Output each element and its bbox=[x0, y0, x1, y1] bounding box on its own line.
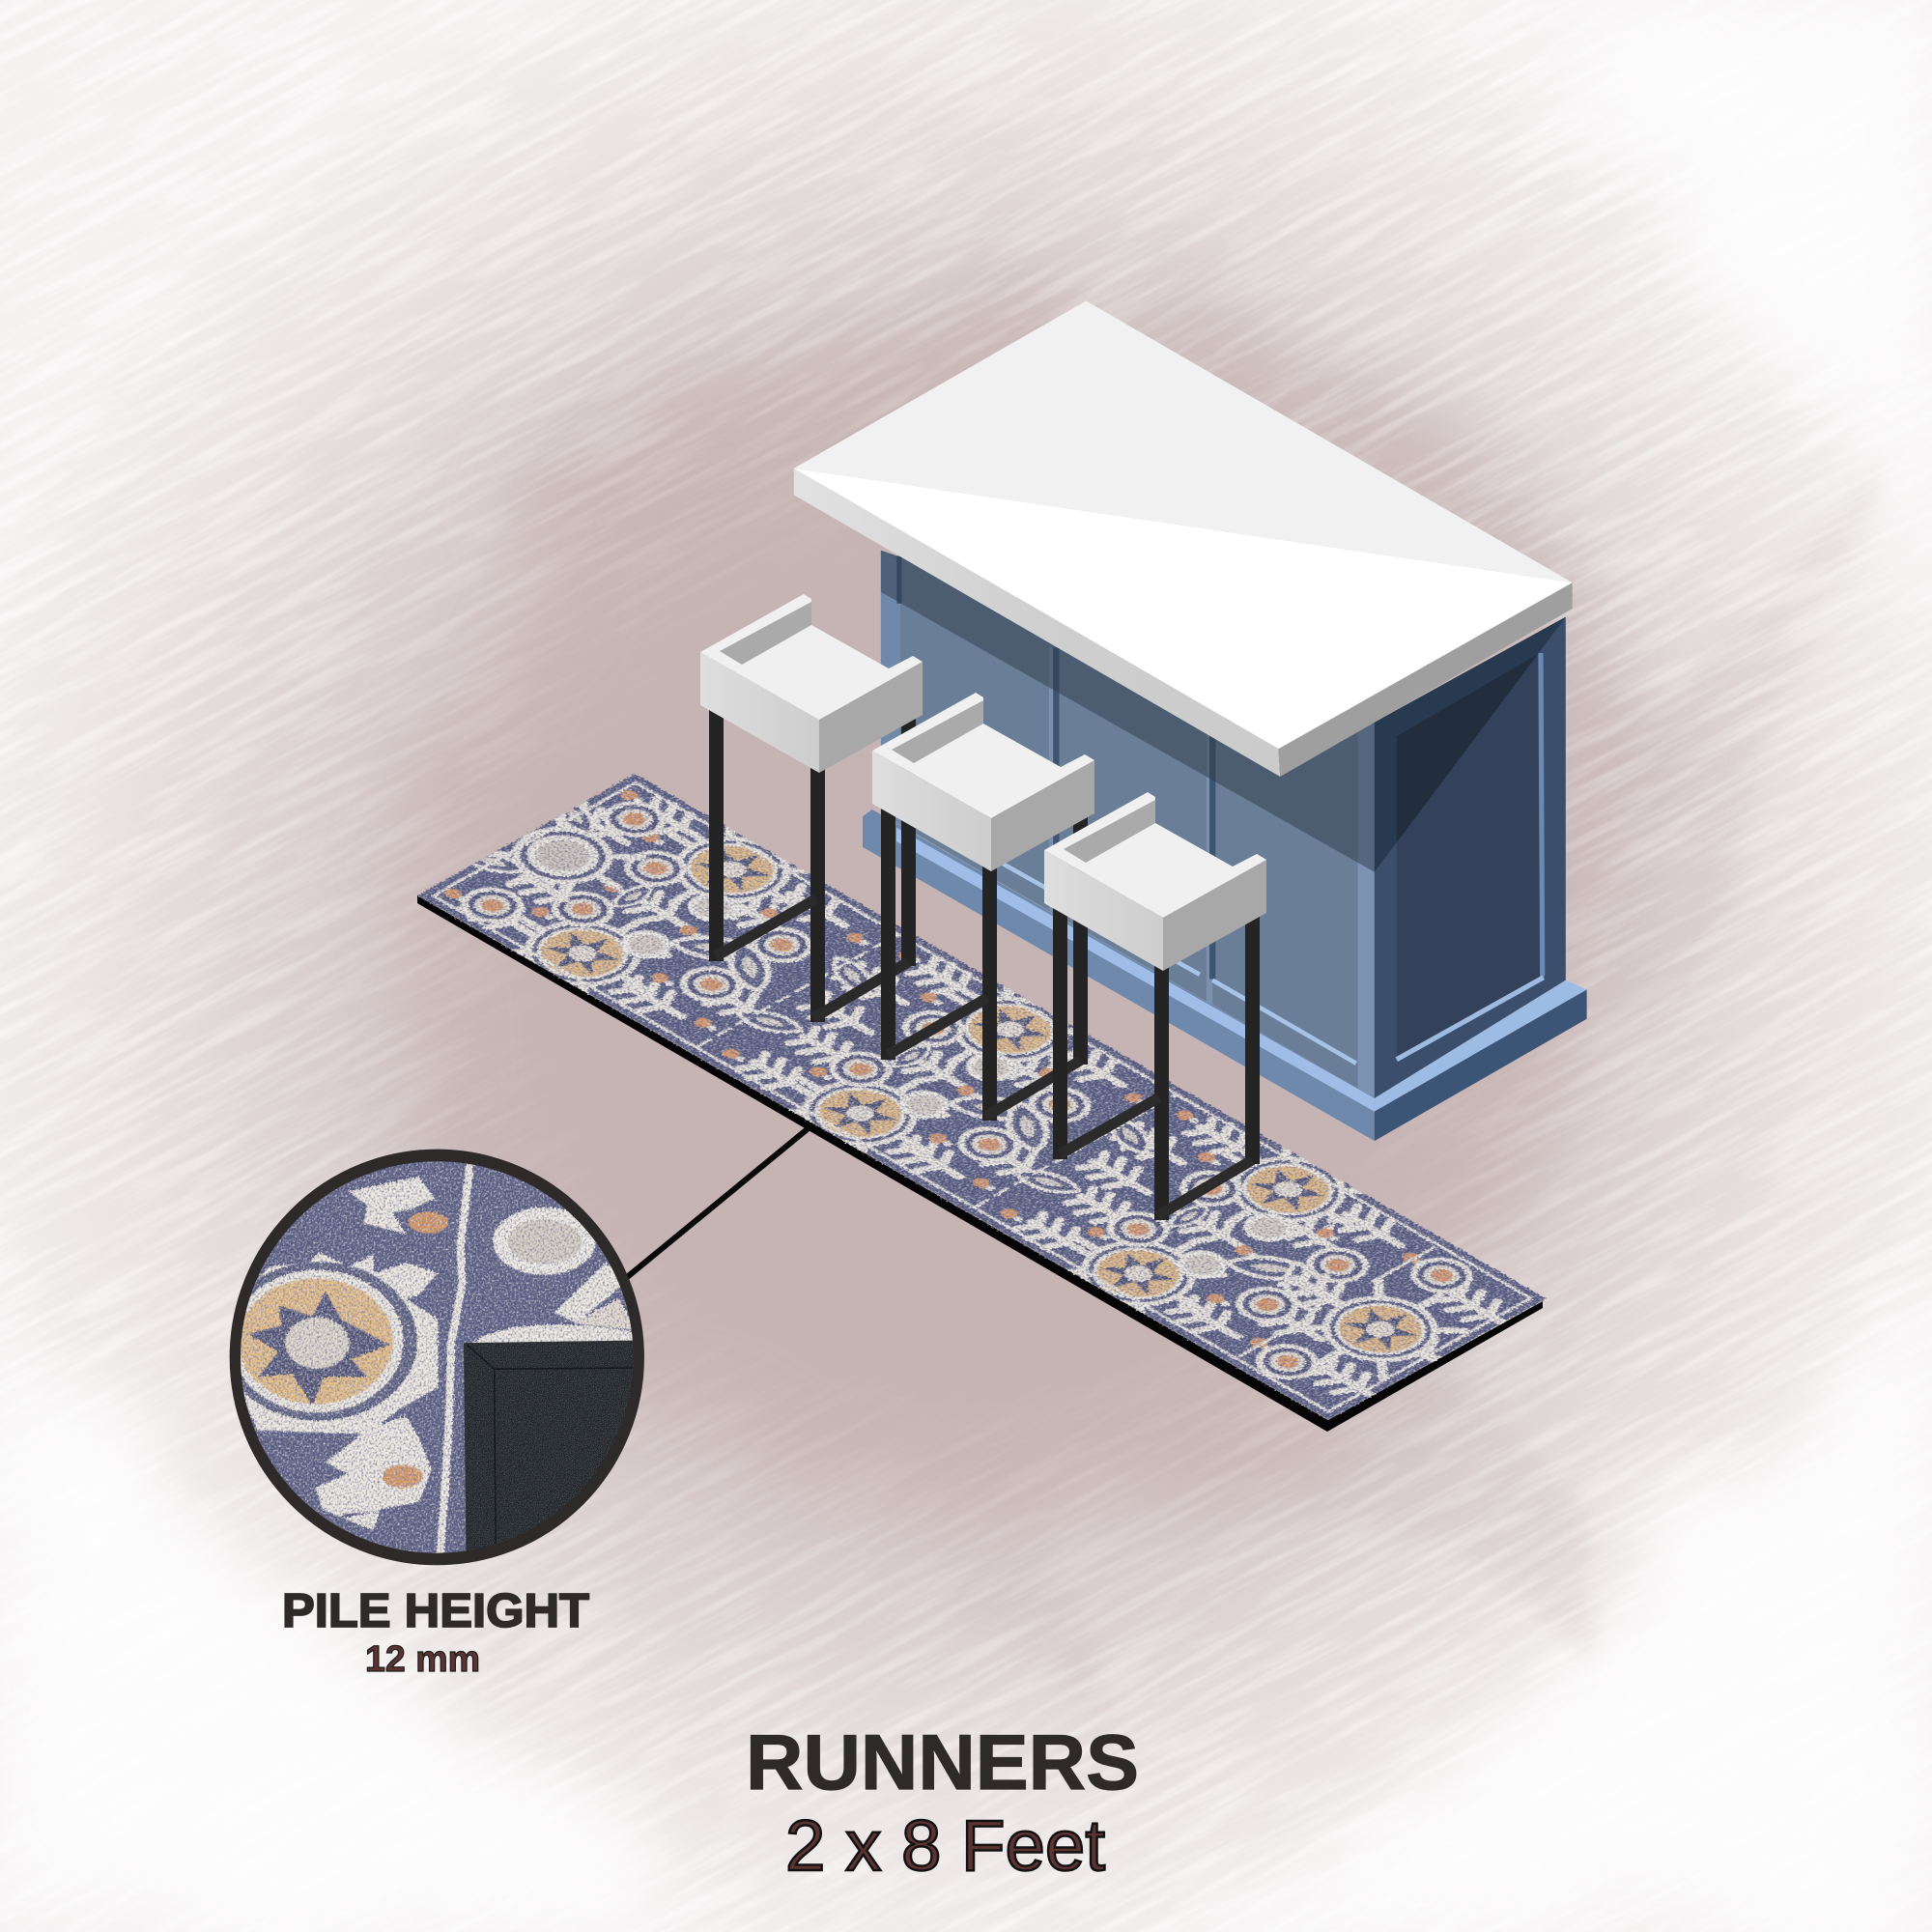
right side face bbox=[1375, 617, 1566, 1098]
rug backing corner bbox=[464, 1341, 636, 1570]
plinth base bbox=[863, 810, 1587, 1141]
lens texture bbox=[241, 1161, 634, 1553]
countertop bbox=[794, 300, 1573, 777]
title: runners: RUNNERS bbox=[746, 1719, 1139, 1806]
connector line from rug to lens bbox=[626, 1127, 810, 1278]
bar stool right bbox=[1044, 792, 1266, 1220]
bar stool left bbox=[700, 594, 923, 1022]
rug surface pattern bbox=[417, 773, 1548, 1420]
label: pile height: PILE HEIGHT bbox=[282, 1585, 589, 1637]
counter shadow on front face bbox=[881, 551, 1375, 872]
magnifier lens: pile detail bbox=[220, 1145, 647, 1574]
kitchen island cabinet bbox=[794, 300, 1587, 1141]
bar stool middle bbox=[872, 693, 1094, 1121]
rug backing edge bbox=[417, 895, 1543, 1432]
subtitle: size: 2 x 8 Feet bbox=[785, 1805, 1105, 1886]
value: 12 mm: 12 mm bbox=[365, 1639, 480, 1680]
front face with panels bbox=[881, 551, 1375, 1098]
rug runner bbox=[417, 773, 1548, 1432]
lens ring bbox=[235, 1155, 639, 1559]
